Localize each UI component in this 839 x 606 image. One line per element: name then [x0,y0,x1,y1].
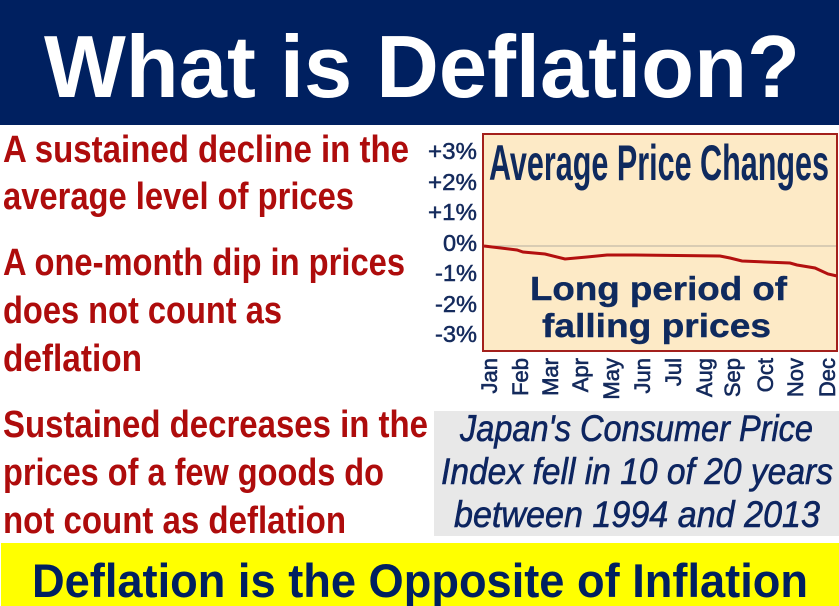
x axis month labels: Jun [630,358,655,393]
x axis month labels: Apr [568,358,593,392]
chart annotation: falling prices [542,307,771,344]
chart annotation [530,270,788,344]
text block: one-month dip: does not count as [3,290,282,332]
y axis labels [428,138,477,347]
x axis month labels: Aug [692,358,717,397]
x axis month labels: Nov [783,358,808,397]
y axis labels: -2% [435,291,477,317]
x axis month labels: May [599,358,624,400]
text block: sustained decline [3,129,409,218]
text block: one-month dip [3,242,405,380]
x axis month labels: Feb [508,358,533,396]
line chart: average price changes [428,134,839,400]
text block: one-month dip: deflation [3,338,142,380]
footer text: Deflation is the Opposite of Inflation [32,554,808,606]
text block: few goods: not count as deflation [3,500,346,542]
title: What is Deflation? [44,17,800,116]
text block: sustained decline: average level of prices [3,176,354,218]
y axis labels: +3% [428,138,477,164]
y axis labels: -1% [435,260,477,286]
y axis labels: +2% [428,169,477,195]
x axis month labels: Jul [661,358,686,386]
x axis month labels: Oct [753,358,778,392]
x axis month labels: Sep [720,358,745,397]
chart annotation: Long period of [530,270,788,307]
y axis labels: +1% [428,199,477,225]
price line [484,246,837,276]
x axis month labels: Mar [538,358,563,396]
text block: few goods: Sustained decreases in the [3,404,428,446]
text block: few goods: prices of a few goods do [3,452,384,494]
x axis month labels [477,358,839,400]
title banner [0,0,839,125]
text block: few goods [3,404,428,542]
footer banner [1,543,839,606]
y axis labels: -3% [435,321,477,347]
y axis labels: 0% [443,230,477,256]
text block: one-month dip: A one-month dip in prices [3,242,405,284]
text block: sustained decline: A sustained decline in the [3,129,409,171]
chart panel [483,134,837,351]
callout: Japan CPI [434,408,839,536]
x axis month labels: Jan [477,358,502,393]
